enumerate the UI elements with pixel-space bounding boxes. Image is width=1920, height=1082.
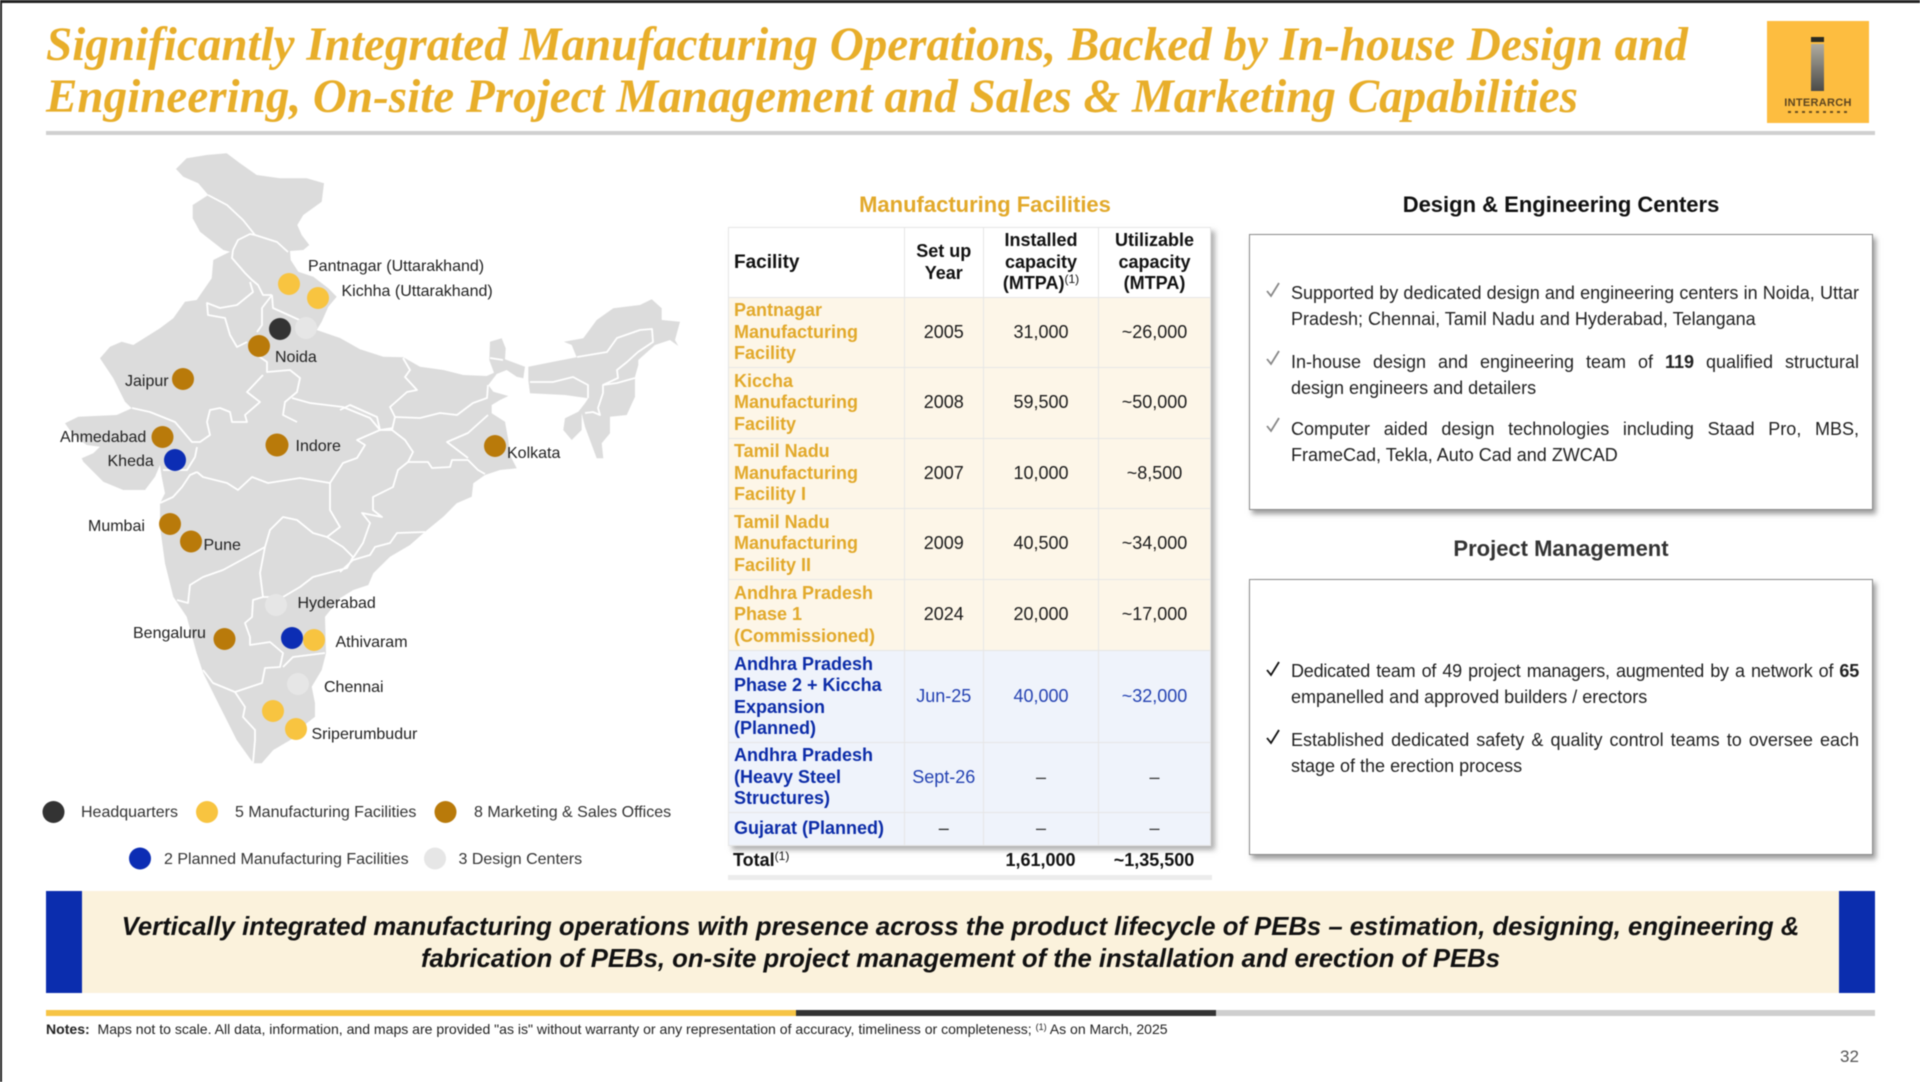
map of India with locations	[60, 153, 680, 764]
row: Tamil Nadu I: Facility I	[734, 484, 806, 504]
row: Andhra Pradesh Phase 2: Jun-25	[916, 686, 971, 706]
table header row: capacity	[1118, 252, 1191, 272]
map of India with locations: Noida	[275, 349, 317, 366]
table total row: 1,61,000	[1005, 850, 1076, 870]
table header row	[729, 230, 1210, 845]
bullet: dedicated centers: Pradesh; Chennai, Tamil Nadu and Hyderabad, Telangana	[1291, 309, 1756, 329]
row: Andhra Pradesh Heavy Steel: Andhra Pradesh	[734, 745, 873, 765]
row: Andhra Pradesh Heavy Steel: –	[1036, 767, 1046, 787]
table header row: Installed	[1004, 230, 1078, 250]
row: Tamil Nadu I: Tamil Nadu	[734, 441, 830, 461]
map legend: 3 Design Centers	[458, 850, 582, 868]
bullet: project managers: Dedicated team of 49 project managers, augmented by a network of 65	[1291, 661, 1859, 681]
row: Tamil Nadu I: ~8,500	[1127, 463, 1182, 483]
row: Pantnagar: Facility	[734, 343, 796, 363]
title rule	[46, 131, 1875, 135]
map of India with locations: Jaipur	[125, 373, 169, 390]
left blue block	[46, 891, 82, 993]
heading: manufacturing facilities: Manufacturing Facilities	[859, 192, 1111, 217]
row: Tamil Nadu II: 2009	[924, 533, 964, 553]
heading: project management: Project Management	[1453, 536, 1669, 561]
row: Andhra Pradesh Phase 2: (Planned)	[734, 718, 816, 738]
table: manufacturing facilities	[728, 227, 1211, 846]
panel: design and engineering centers	[1249, 234, 1873, 510]
row: Tamil Nadu II: Facility II	[734, 555, 811, 575]
map of India with locations: Kheda	[108, 453, 154, 470]
logo: Interarch	[1767, 21, 1869, 123]
row: Andhra Pradesh Phase 2	[729, 651, 1210, 742]
footer progress bar	[46, 1010, 1875, 1016]
map of India with locations: Bengaluru	[133, 625, 206, 642]
callout banner	[46, 891, 1875, 993]
table total row: Total(1)	[733, 849, 789, 870]
bullet: safety and quality: Established dedicated safety & quality control teams to oversee each	[1291, 730, 1859, 750]
row: Andhra Pradesh Phase 1: Phase 1	[734, 604, 802, 624]
check icon	[1266, 282, 1280, 298]
bullet: dedicated centers	[1291, 283, 1860, 330]
callout text	[122, 913, 1799, 974]
row: Andhra Pradesh Phase 1: (Commissioned)	[734, 626, 875, 646]
row: Andhra Pradesh Heavy Steel	[729, 743, 1210, 812]
bullet: safety and quality	[1291, 730, 1859, 777]
title: Engineering, On-site Project Management and Sales & Marketing Capabilities	[46, 71, 1578, 123]
right blue block	[1839, 891, 1875, 993]
row: Gujarat	[729, 813, 1210, 845]
map of India with locations: Mumbai	[88, 518, 145, 535]
row: Gujarat: –	[939, 818, 949, 838]
bullet: in-house team: design engineers and detailers	[1291, 378, 1536, 398]
row: Andhra Pradesh Heavy Steel: (Heavy Steel	[734, 767, 841, 787]
row: Andhra Pradesh Heavy Steel: –	[1149, 767, 1160, 787]
map of India with locations: Kichha (Uttarakhand)	[342, 283, 493, 300]
table header row: capacity	[1005, 252, 1077, 272]
row: Andhra Pradesh Heavy Steel: Sept-26	[912, 767, 975, 787]
row: Andhra Pradesh Phase 1: Andhra Pradesh	[734, 583, 873, 603]
row: Gujarat: –	[1149, 818, 1160, 838]
map of India with locations: Indore	[296, 438, 341, 455]
row: Andhra Pradesh Phase 2: ~32,000	[1122, 686, 1187, 706]
row: Andhra Pradesh Phase 1: 20,000	[1013, 604, 1069, 624]
bullet: in-house team: In-house design and engineering team of 119 qualified structural	[1291, 352, 1859, 372]
map legend	[42, 800, 672, 870]
row: Andhra Pradesh Phase 1: 2024	[924, 604, 964, 624]
title	[45, 19, 1690, 123]
row: Kiccha: Kiccha	[734, 371, 793, 391]
table header row: Utilizable	[1115, 230, 1194, 250]
row: Gujarat: Gujarat (Planned)	[734, 818, 884, 838]
check icon	[1266, 417, 1280, 433]
table header row: Facility	[734, 252, 799, 273]
table total row	[728, 846, 1212, 880]
page number: 32	[1840, 1047, 1859, 1066]
row: Andhra Pradesh Phase 2: Andhra Pradesh	[734, 654, 873, 674]
row: Tamil Nadu I	[729, 439, 1210, 508]
table header row: (MTPA)	[1124, 273, 1185, 293]
row: Tamil Nadu II: ~34,000	[1122, 533, 1187, 553]
map of India with locations: Athivaram	[336, 634, 408, 651]
map legend: 2 Planned Manufacturing Facilities	[164, 850, 409, 868]
row: Pantnagar: Manufacturing	[734, 322, 858, 342]
bullet: project managers: empanelled and approved builders / erectors	[1291, 687, 1647, 707]
row: Andhra Pradesh Phase 1	[729, 580, 1210, 650]
bullet: design technologies: Computer aided design technologies including Staad Pro, MBS,	[1291, 419, 1859, 439]
row: Tamil Nadu II	[729, 509, 1210, 579]
row: Pantnagar: 31,000	[1013, 322, 1069, 342]
row: Tamil Nadu II: Manufacturing	[734, 533, 858, 553]
check icon	[1266, 350, 1280, 366]
map of India with locations: Kolkata	[507, 445, 560, 462]
row: Tamil Nadu II: Tamil Nadu	[734, 512, 830, 532]
check icon	[1266, 729, 1280, 745]
row: Andhra Pradesh Phase 2: 40,000	[1013, 686, 1069, 706]
map of India with locations: Pantnagar (Uttarakhand)	[308, 258, 484, 275]
map of India with locations: Pune	[204, 537, 241, 554]
bullet: design technologies: FrameCad, Tekla, Auto Cad and ZWCAD	[1291, 445, 1618, 465]
check icon	[1266, 661, 1280, 677]
bullet: design technologies	[1291, 419, 1859, 465]
row: Tamil Nadu I: 2007	[924, 463, 964, 483]
row: Pantnagar: 2005	[924, 322, 964, 342]
bullet: in-house team	[1291, 352, 1859, 399]
row: Pantnagar: ~26,000	[1122, 322, 1187, 342]
map legend: 5 Manufacturing Facilities	[235, 804, 416, 821]
row: Tamil Nadu I: Manufacturing	[734, 463, 858, 483]
table total row: ~1,35,500	[1114, 850, 1194, 870]
map legend: 8 Marketing & Sales Offices	[474, 804, 671, 821]
map of India with locations: Sriperumbudur	[312, 726, 417, 742]
row: Pantnagar: Pantnagar	[734, 300, 822, 320]
logo: Interarch: INTERARCH	[1784, 97, 1852, 109]
row: Kiccha: Facility	[734, 414, 796, 434]
row: Kiccha: Manufacturing	[734, 392, 858, 412]
row: Kiccha	[729, 368, 1210, 438]
callout text: Vertically integrated manufacturing operations with presence across the product lifecycle of PEBs – estimation, designing, engineering &	[122, 913, 1799, 941]
map of India with locations: Chennai	[324, 679, 384, 696]
map of India with locations: Ahmedabad	[60, 429, 146, 446]
table header row: Year	[925, 262, 963, 282]
row: Andhra Pradesh Phase 1: ~17,000	[1122, 604, 1187, 624]
bullet: project managers	[1291, 661, 1860, 708]
top black edge	[0, 0, 1920, 3]
row: Kiccha: 2008	[924, 392, 964, 412]
map of India with locations: Hyderabad	[298, 595, 376, 612]
notes: Notes: Maps not to scale. All data, information, and maps are provided "as is" without warranty or any representation of accuracy, timeliness or completeness; (1) As on March, 2025	[46, 1021, 1168, 1037]
row: Gujarat: –	[1036, 818, 1046, 838]
row: Andhra Pradesh Heavy Steel: Structures)	[734, 788, 830, 808]
row: Andhra Pradesh Phase 2: Expansion	[734, 696, 825, 716]
row: Pantnagar	[729, 298, 1210, 367]
table header row: (MTPA)(1)	[1003, 272, 1079, 293]
heading: design and engineering centers: Design & Engineering Centers	[1403, 192, 1719, 217]
bullet: dedicated centers: Supported by dedicated design and engineering centers in Noida, Uttar	[1291, 283, 1859, 303]
row: Andhra Pradesh Phase 2: Phase 2 + Kiccha	[734, 675, 882, 695]
bullet: safety and quality: stage of the erection process	[1291, 756, 1522, 776]
row: Tamil Nadu II: 40,500	[1013, 533, 1069, 553]
left black edge	[0, 0, 2, 1082]
title: Significantly Integrated Manufacturing Operations, Backed by In-house Design and	[46, 19, 1688, 71]
callout text: fabrication of PEBs, on-site project management of the installation and erection of PEBs	[421, 945, 1500, 973]
row: Kiccha: ~50,000	[1122, 392, 1187, 412]
row: Tamil Nadu I: 10,000	[1013, 463, 1069, 483]
table header row: Set up	[916, 241, 971, 261]
map legend: Headquarters	[81, 804, 178, 821]
row: Kiccha: 59,500	[1013, 392, 1069, 412]
panel: project management	[1249, 579, 1873, 855]
